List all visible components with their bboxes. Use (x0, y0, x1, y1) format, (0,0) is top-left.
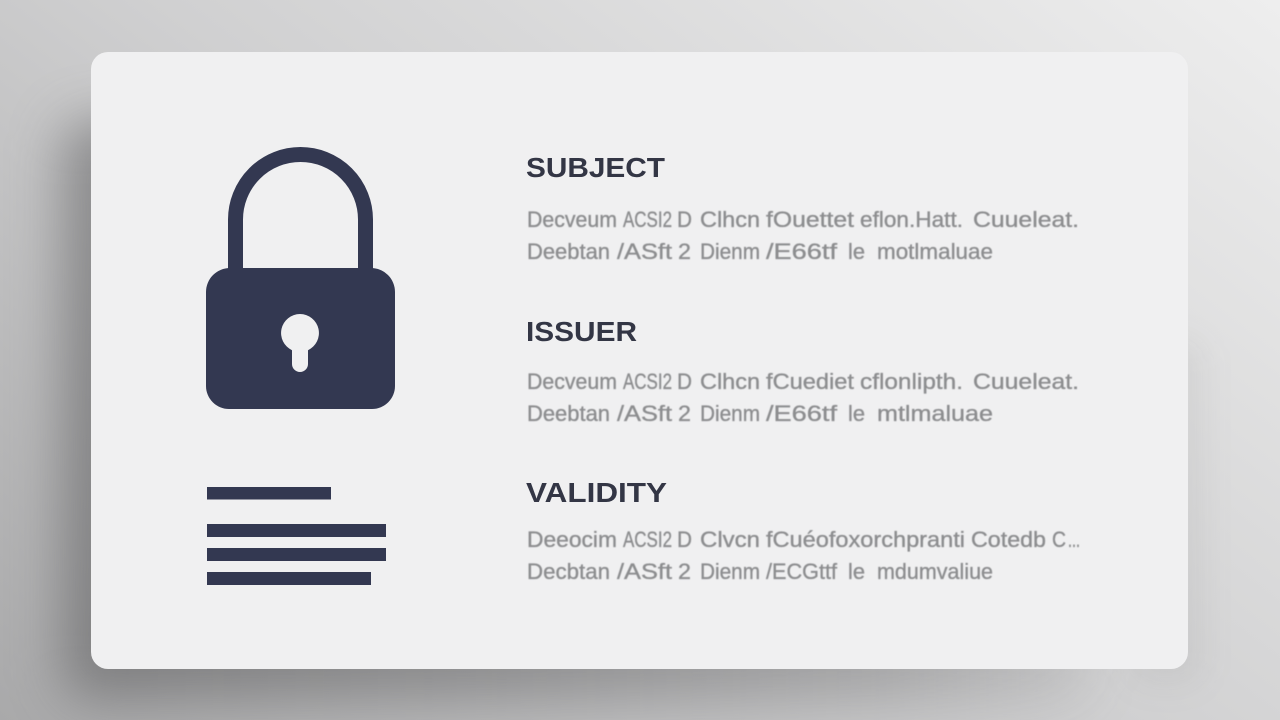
panel: certificate card (91, 52, 1188, 669)
text: subject line 2: 2 (678, 239, 691, 264)
text: validity line 2: Decbtan (527, 559, 610, 584)
text: subject line 1: ACSI2 (623, 207, 672, 232)
text: validity line 2: /ASft (617, 559, 672, 584)
card shadow (62, 120, 1092, 700)
text: subject line 2: /ASft (617, 239, 672, 264)
card shadow right (1130, 340, 1202, 684)
text: validity line 1: fCuéofoxorchpranti (766, 527, 965, 552)
text: issuer line 1: Cuueleat. (973, 369, 1079, 394)
text: issuer line 2: le (848, 401, 865, 426)
text: validity line 2: Dienm (700, 559, 760, 584)
text: issuer line 2: /ASft (617, 401, 672, 426)
text: validity line 1: Cotedb (971, 527, 1046, 552)
text: validity line 1: Clvcn (700, 527, 760, 552)
text: issuer line 2: /E66tf (766, 401, 838, 426)
text: issuer line 2: mtlmaluae (877, 401, 993, 426)
text: issuer line 1: Clhcn (700, 369, 760, 394)
text: validity line 2: /ECGttf (766, 559, 838, 584)
icon: document lines (207, 487, 386, 585)
text: subject line 2: Deebtan (527, 239, 610, 264)
text: validity line 2: 2 (678, 559, 691, 584)
text: validity line 2: mdumvaliue (877, 559, 993, 584)
icon: padlock (206, 154, 395, 409)
text: subject line 1: Decveum (527, 207, 617, 232)
text: validity line 1: ACSI2 (623, 527, 672, 552)
text: issuer line 2: Deebtan (527, 401, 610, 426)
text: subject line 2: le (848, 239, 865, 264)
text: issuer line 2: 2 (678, 401, 691, 426)
text: issuer line 1: fCuediet (766, 369, 854, 394)
text: validity line 1: C (1052, 527, 1066, 552)
text: issuer line 2: Dienm (700, 401, 760, 426)
text: subject line 2: motlmaluae (877, 239, 993, 264)
section: subject (526, 152, 1079, 264)
text: subject line 1: eflon.Hatt. (860, 207, 963, 232)
text: issuer line 1: cflonlipth. (860, 369, 963, 394)
text: subject line 1: Clhcn (700, 207, 760, 232)
text: subject line 1: fOuettet (766, 207, 854, 232)
text: issuer line 1: Decveum (527, 369, 617, 394)
text: subject line 1: D (677, 207, 692, 232)
heading: validity: VALIDITY (526, 477, 667, 508)
heading: issuer: ISSUER (526, 316, 637, 347)
text: subject line 1: Cuueleat. (973, 207, 1079, 232)
heading: subject: SUBJECT (526, 152, 665, 183)
text: subject line 2: /E66tf (766, 239, 838, 264)
text: subject line 2: Dienm (700, 239, 760, 264)
text: validity line 1: ... (1068, 527, 1080, 552)
text: issuer line 1: ACSI2 (623, 369, 672, 394)
text: issuer line 1: D (677, 369, 692, 394)
text: validity line 1: D (677, 527, 692, 552)
section: validity (526, 477, 1080, 584)
section: issuer (526, 316, 1079, 426)
text: validity line 2: le (848, 559, 865, 584)
text: validity line 1: Deeocim (527, 527, 617, 552)
